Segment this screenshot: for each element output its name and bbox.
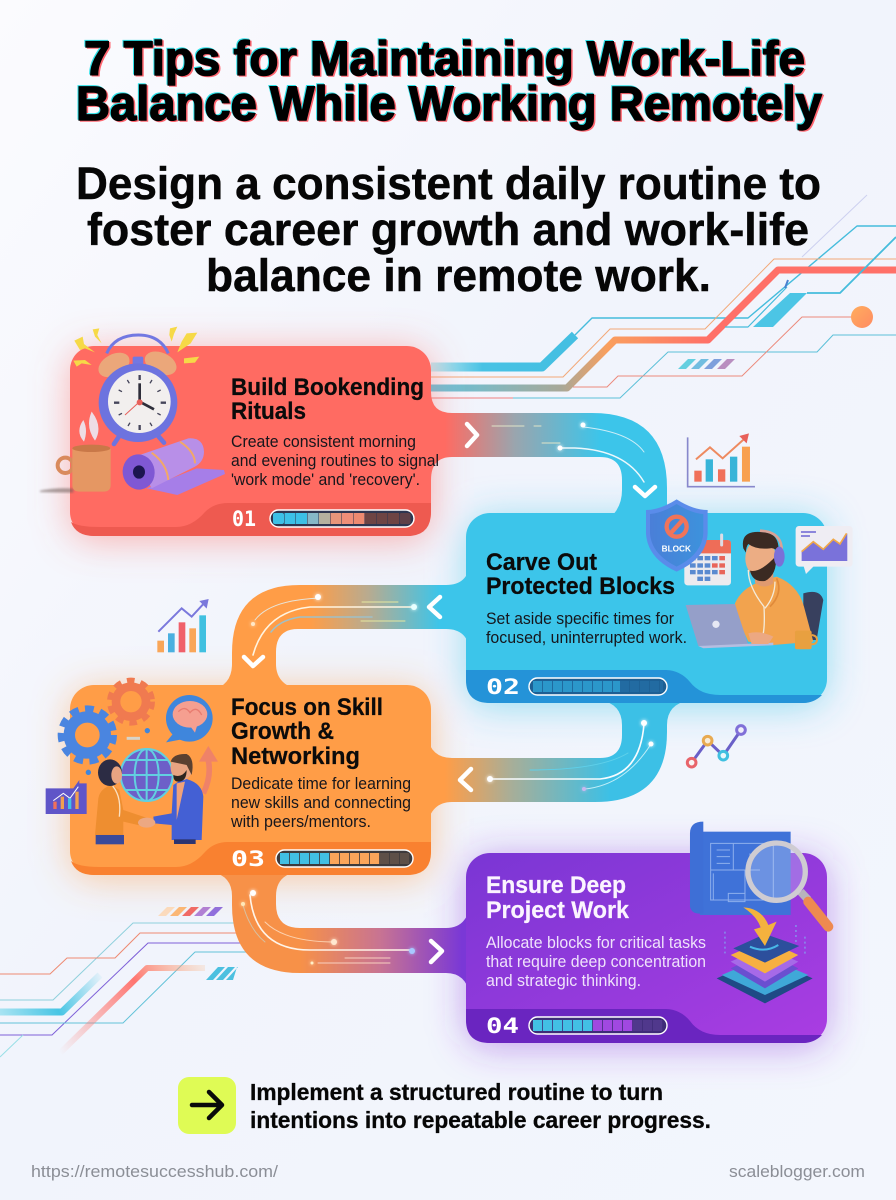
icon: arrow badge (178, 1077, 236, 1134)
card 2 illustration: shield, calendar and person: BLOCK (662, 543, 691, 553)
subtitle: Design a consistent daily routine to (76, 158, 821, 209)
connector flow lights (243, 426, 651, 963)
closing statement (250, 1079, 711, 1133)
card 3 footer band (71, 842, 431, 875)
connector: step 2 down to step 3 side (427, 700, 690, 826)
card 3 illustration: gears, globe and handshake (46, 681, 218, 844)
subtitle: foster career growth and work-life (87, 204, 809, 255)
card 1 illustration: clock, mug and mat (40, 327, 225, 495)
card 3 description (230, 775, 411, 831)
card 4 progress bar (529, 1017, 667, 1034)
arrow: step 3 to 4 (431, 941, 442, 962)
source url: https://remotesuccesshub.com/ (31, 1163, 278, 1181)
card 2 footer band (466, 670, 822, 703)
card 4 description: that require deep concentration (486, 953, 706, 971)
subtitle (76, 158, 821, 301)
card 3 heading (231, 694, 383, 770)
card 1 description: 'work mode' and 'recovery'. (231, 471, 420, 489)
card 4 number: 04 (486, 1014, 519, 1038)
connector: step 3 to step 4 (212, 872, 470, 995)
icon: small growth chart (157, 599, 209, 652)
panel: step 3 (46, 681, 431, 875)
card 2 number: 02 (486, 675, 520, 699)
card 4 illustration: blueprint, magnifier and layers (690, 822, 828, 1003)
card 3 number: 03 (231, 847, 265, 871)
card 1 description: and evening routines to signal (231, 452, 439, 470)
card 4 description: and strategic thinking. (486, 972, 641, 990)
card 3 description: new skills and connecting (231, 794, 411, 812)
card 1 footer band (71, 503, 431, 536)
arrow: step 2 to 3 side (460, 769, 471, 790)
card 4 body (466, 853, 827, 1043)
connector: step 2 to step 3 (212, 563, 470, 690)
closing statement: intentions into repeatable career progress. (250, 1107, 711, 1133)
card 4 description: Allocate blocks for critical tasks (486, 934, 706, 952)
connector: step 1 to step 2 (431, 392, 667, 525)
card 2 description: focused, uninterrupted work. (486, 629, 687, 647)
card 3 progress bar (276, 850, 413, 867)
icon: node line chart (687, 726, 745, 767)
title: Balance While Working Remotely (76, 78, 822, 131)
card 1 description (231, 433, 439, 489)
circuit lines: bottom left (0, 907, 254, 1057)
card 1 heading (231, 374, 424, 425)
card 1 description: Create consistent morning (231, 433, 416, 451)
card 2 heading: Protected Blocks (486, 573, 675, 600)
title: 7 Tips for Maintaining Work-Life (84, 33, 805, 86)
card 3 heading: Growth & (231, 718, 334, 745)
card 3 heading: Focus on Skill (231, 694, 383, 721)
title: Balance While Working Remotely (76, 78, 822, 131)
brand credit: scaleblogger.com (729, 1163, 865, 1181)
card 3 heading: Networking (231, 743, 360, 770)
closing statement: Implement a structured routine to turn (250, 1079, 663, 1105)
card 4 heading: Ensure Deep (486, 872, 626, 899)
card 1 number: 01 (232, 507, 256, 531)
card 2 description: Set aside specific times for (486, 610, 674, 628)
subtitle: balance in remote work. (206, 250, 711, 301)
card glows (70, 350, 827, 1047)
card 3 description: Dedicate time for learning (231, 775, 411, 793)
card 2 progress bar (529, 678, 667, 695)
arrow: step 1 to 2 (467, 424, 477, 446)
card 4 heading (486, 872, 630, 924)
card 1 progress bar (270, 510, 414, 527)
card 1 heading: Build Bookending (231, 374, 424, 401)
card 2 heading: Carve Out (486, 549, 597, 576)
arrow: step 2 to 3 left (429, 597, 440, 617)
title (76, 33, 822, 131)
card 4 description (486, 934, 706, 990)
panel: step 4 (466, 822, 828, 1043)
card 2 heading (486, 549, 675, 600)
card 1 body (70, 346, 431, 536)
card 2 description (486, 610, 687, 647)
arrow: step 2 to 3 downward (244, 657, 263, 666)
card 4 footer band (466, 1009, 822, 1043)
panel: step 2 (466, 433, 853, 703)
arrow: step 1 to 2 downward (635, 487, 655, 496)
card 2 illustration: shield, calendar and person (646, 433, 853, 649)
card 2 body (466, 513, 827, 703)
title: 7 Tips for Maintaining Work-Life (84, 33, 805, 86)
card 1 heading: Rituals (231, 398, 306, 425)
circuit lines: top right (431, 195, 896, 398)
card 3 body (70, 685, 431, 875)
panel: step 1 (40, 327, 439, 536)
card 3 description: with peers/mentors. (230, 813, 371, 831)
connector light points (241, 422, 654, 964)
card 4 heading: Project Work (486, 897, 630, 924)
